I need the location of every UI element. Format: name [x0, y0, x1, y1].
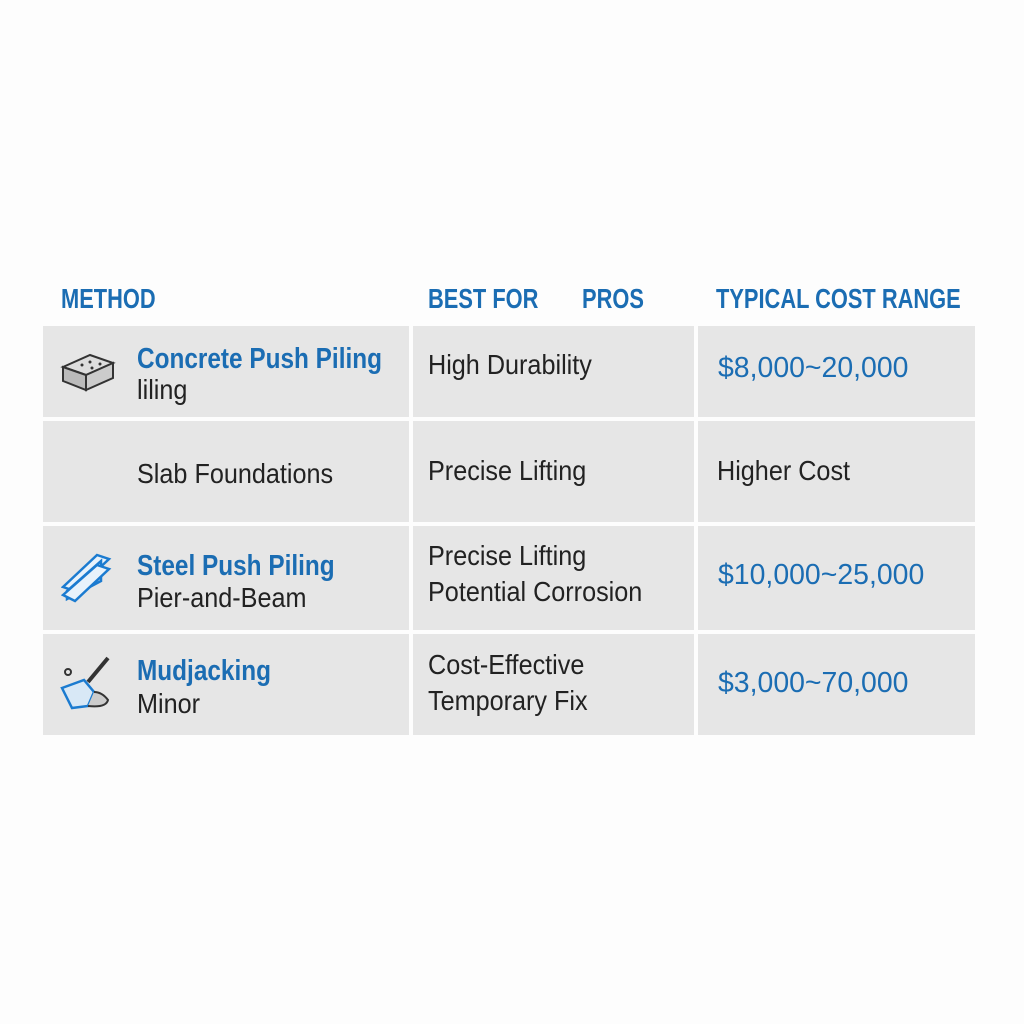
row 4 cost: $3,000~70,000: [718, 667, 908, 699]
row 4 pros: Cost-Effective: [428, 649, 584, 680]
icon: trowel: [60, 656, 110, 710]
row 3 pros: Precise Lifting: [428, 540, 586, 571]
header: method: METHOD: [61, 283, 156, 314]
text: Pier-and-Beam: [137, 582, 306, 613]
row 4 method: Mudjacking: [137, 655, 271, 687]
row 1 cost: $8,000~20,000: [718, 352, 908, 384]
icon: concrete block: [60, 354, 116, 392]
header: best for: BEST FOR: [428, 283, 538, 314]
row 3 cost: $10,000~25,000: [718, 559, 924, 591]
text: liling: [137, 374, 187, 405]
header: pros: PROS: [582, 283, 644, 314]
row 1 pros: High Durability: [428, 349, 592, 380]
table: [43, 326, 975, 735]
text: Higher Cost: [717, 455, 850, 486]
text: Precise Lifting: [428, 455, 586, 486]
row 2: Slab Foundations: [137, 458, 333, 489]
text: Temporary Fix: [428, 685, 588, 716]
text: Potential Corrosion: [428, 576, 642, 607]
header: typical cost range: TYPICAL COST RANGE: [716, 283, 961, 314]
row 1 method: Concrete Push Piling: [137, 343, 382, 375]
text: Minor: [137, 688, 200, 719]
icon: steel beam: [61, 554, 112, 602]
row 3 method: Steel Push Piling: [137, 550, 335, 582]
